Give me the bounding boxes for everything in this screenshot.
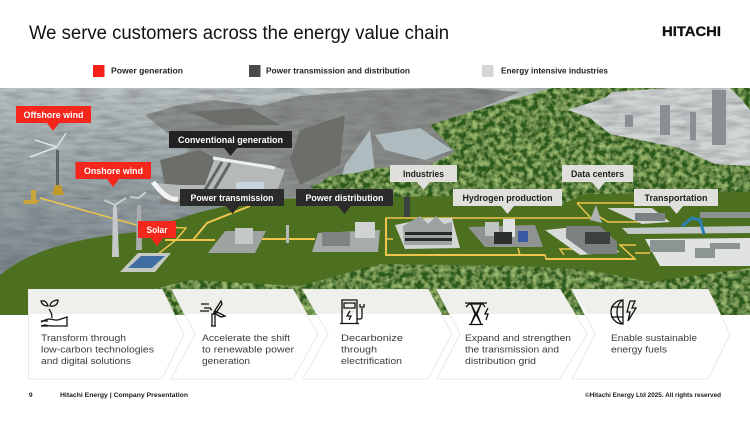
power lines xyxy=(40,198,650,259)
title: We serve customers across the energy value chain xyxy=(29,23,449,44)
text: Transform through xyxy=(41,333,126,344)
label: Power distribution: Power distribution xyxy=(306,193,384,203)
label: Data centers xyxy=(562,165,633,190)
text: energy fuels xyxy=(611,344,667,356)
illustration: energy landscape xyxy=(0,88,750,315)
label: Hydrogen production: Hydrogen production xyxy=(462,193,552,203)
label: Power distribution xyxy=(296,189,393,214)
icon: charging station xyxy=(340,300,364,324)
text: through xyxy=(341,344,377,356)
chevron 1: Transform xyxy=(28,290,184,379)
label: Hydrogen production xyxy=(453,189,562,214)
legend: Power generation xyxy=(111,66,183,76)
text: Decarbonize xyxy=(341,333,403,344)
label: Onshore wind xyxy=(76,162,151,187)
chevron 2: Accelerate xyxy=(171,290,318,379)
label: Data centers: Data centers xyxy=(571,169,624,179)
text: to renewable power xyxy=(202,344,295,356)
sea xyxy=(0,88,750,283)
label: Transportation xyxy=(634,189,718,214)
label: Onshore wind: Onshore wind xyxy=(84,166,143,176)
city towers xyxy=(625,90,726,145)
glacier highlights xyxy=(340,128,452,182)
footer: presentation name: Hitachi Energy | Company Presentation xyxy=(60,392,188,399)
label: Offshore wind xyxy=(16,106,91,131)
label: Conventional generation xyxy=(169,131,292,156)
dam xyxy=(153,158,285,200)
icon: globe with lightning xyxy=(611,300,636,324)
lower forest band xyxy=(120,264,750,315)
label: Offshore wind: Offshore wind xyxy=(24,110,84,120)
label: Industries: Industries xyxy=(403,169,444,179)
land xyxy=(0,192,750,315)
label: Power transmission: Power transmission xyxy=(190,193,274,203)
factory xyxy=(395,197,460,249)
text: generation xyxy=(202,356,250,367)
legend: Energy intensive industries xyxy=(501,66,609,76)
legend xyxy=(93,65,609,77)
label: Transportation: Transportation xyxy=(644,193,708,203)
chevron 5: Enable xyxy=(572,290,730,379)
data center xyxy=(545,205,620,255)
label: Solar xyxy=(138,221,176,246)
transmission plot xyxy=(208,225,289,253)
chevron 4: Expand xyxy=(437,290,587,379)
text: the transmission and xyxy=(465,344,559,356)
hydrogen plant xyxy=(468,219,543,247)
text: electrification xyxy=(341,356,402,367)
logo: Hitachi: HITACHI xyxy=(662,24,721,39)
mountains xyxy=(145,88,520,205)
icon: wind turbine xyxy=(200,301,225,326)
icon: hand with plant xyxy=(41,300,67,326)
upper forest xyxy=(310,88,750,200)
text: Enable sustainable xyxy=(611,333,697,344)
mid forest band xyxy=(300,168,750,205)
footer: page number: 9 xyxy=(29,392,33,399)
text: distribution grid xyxy=(465,356,536,367)
footer: copyright: ©Hitachi Energy Ltd 2025. All rights reserved xyxy=(585,391,721,399)
label: Conventional generation: Conventional generation xyxy=(178,135,283,145)
city xyxy=(568,88,750,166)
text: and digital solutions xyxy=(41,356,131,367)
text: Expand and strengthen xyxy=(465,333,571,344)
transportation xyxy=(607,208,750,266)
distribution plot xyxy=(312,222,380,252)
text: low-carbon technologies xyxy=(41,344,154,356)
onshore turbines xyxy=(104,192,146,257)
chevron 3: Decarbonize xyxy=(303,290,452,379)
solar plot xyxy=(120,253,171,272)
offshore turbine xyxy=(23,133,66,204)
legend: Power transmission and distribution xyxy=(266,66,410,76)
label: Power transmission xyxy=(180,189,284,214)
rock shadows xyxy=(160,108,345,185)
label: Industries xyxy=(390,165,457,190)
text: Accelerate the shift xyxy=(202,333,290,344)
icon: transmission tower xyxy=(465,303,488,324)
label: Solar: Solar xyxy=(146,225,168,235)
